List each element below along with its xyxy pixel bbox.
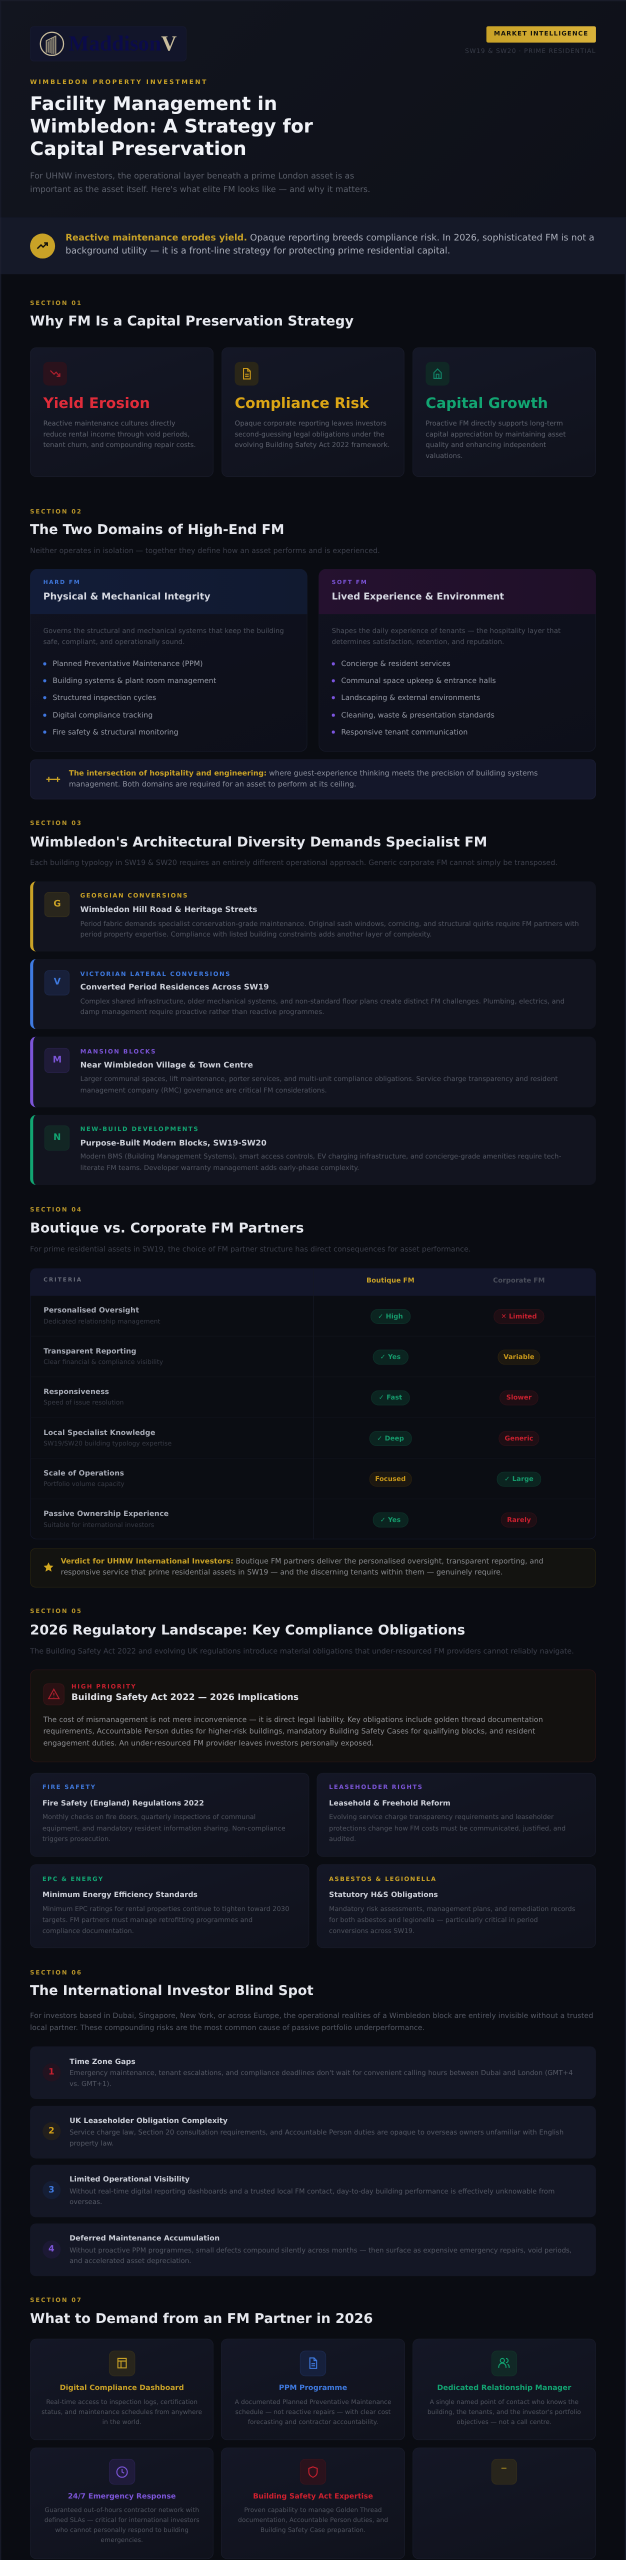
panel text: requirements, Accountable Person duties for higher-risk buildings, mandatory Building Safety Cases for qualifying blocks, and resident <box>43 1727 535 1735</box>
item text: and accelerated asset depreciation. <box>69 2257 191 2265</box>
card heading: Leasehold & Freehold Reform <box>329 1799 450 1807</box>
list: Concierge & resident services <box>341 659 450 668</box>
card text: valuations. <box>426 452 463 460</box>
number 4: 4 <box>48 2244 54 2254</box>
badge N <box>45 1126 70 1151</box>
card text: period property expertise. Compliance with listed building constraints adds another layer of complexity. <box>80 930 432 939</box>
icon: people <box>491 2351 517 2376</box>
criterion note: Dedicated relationship management <box>44 1319 160 1325</box>
panel text: The cost of mismanagement is not mere inconvenience — it is direct legal liability. Key obligations include golden thread documentation <box>43 1715 543 1724</box>
verdict text: Verdict for UHNW International Investors: Boutique FM partners deliver the personalised oversight, transparent reporting, and <box>61 1557 543 1565</box>
card: fire safety <box>30 1773 309 1857</box>
card text <box>42 1814 285 1843</box>
card text <box>426 419 566 460</box>
card: mansion blocks <box>30 1037 596 1107</box>
callout: verdict <box>30 1548 596 1587</box>
card text: compliance documentation. <box>42 1927 134 1935</box>
heading: Wimbledon's Architectural Diversity Demands Specialist FM <box>30 834 487 850</box>
pill: corporate: Generic <box>505 1435 533 1442</box>
section label: SECTION 02 <box>30 509 82 515</box>
pill: boutique <box>371 1390 410 1406</box>
pill: boutique: ✓ Yes <box>380 1353 401 1361</box>
card: new-build developments <box>30 1115 596 1185</box>
card text: documentation, Accountable Person duties, and <box>238 2517 388 2524</box>
card text: second-guessing legal obligations under the <box>235 430 384 438</box>
section 03 <box>30 820 596 1185</box>
tag: HARD FM <box>43 580 81 586</box>
icon: trending down <box>43 362 67 386</box>
icon: clock <box>109 2459 135 2485</box>
card text: forecasting and contractor accountability. <box>248 2419 378 2426</box>
pill: boutique <box>370 1309 410 1324</box>
card text: management company (RMC) governance are critical FM considerations. <box>80 1086 327 1094</box>
list: Fire safety & structural monitoring <box>53 728 178 736</box>
card text <box>427 2399 581 2426</box>
heading: The Two Domains of High-End FM <box>30 522 284 538</box>
pill: corporate: ✓ Large <box>504 1475 533 1483</box>
summary strip <box>0 217 626 274</box>
heading: 2026 Regulatory Landscape: Key Compliance Obligations <box>30 1623 465 1638</box>
pill: boutique: ✓ High <box>378 1313 403 1320</box>
panel heading: Physical & Mechanical Integrity <box>43 591 210 602</box>
logo wordmark: MaddisonV <box>69 32 177 55</box>
card text <box>80 919 579 939</box>
tag: VICTORIAN LATERAL CONVERSIONS <box>80 971 231 978</box>
card text <box>221 2506 405 2536</box>
card heading: PPM Programme <box>279 2383 347 2392</box>
card: empty placeholder <box>412 2447 596 2559</box>
section 05 <box>30 1608 596 1948</box>
description: safe, compliant, and operationally sound. <box>43 638 185 646</box>
item text: Service charge law, Section 20 consultation requirements, and Accountable Person duties are opaque to overseas owners unfamiliar with English <box>69 2128 564 2136</box>
card text: capital appreciation by maintaining asset <box>426 430 566 438</box>
card text: audited. <box>329 1836 356 1843</box>
pill: corporate: Variable <box>504 1353 534 1361</box>
description <box>332 627 561 646</box>
card text: evolving Building Safety Act 2022 framework. <box>235 441 390 449</box>
pill: corporate <box>499 1431 539 1446</box>
criterion: Responsiveness <box>44 1387 109 1396</box>
callout text <box>68 768 538 788</box>
number 2 <box>42 2122 60 2140</box>
description: Governs the structural and mechanical systems that keep the building <box>43 627 284 635</box>
section intro: Each building typology in SW19 & SW20 requires an entirely different operational approach. Generic corporate FM cannot simply be transposed. <box>30 858 558 867</box>
card heading: Statutory H&S Obligations <box>329 1890 438 1899</box>
list: Landscaping & external environments <box>341 693 480 702</box>
callout text: The intersection of hospitality and engineering: where guest-experience thinking meets the precision of building systems <box>69 768 538 777</box>
column: boutique: Boutique FM <box>366 1276 414 1285</box>
title <box>30 93 313 161</box>
icon: trending up <box>30 233 55 258</box>
icon: dashboard <box>109 2351 135 2376</box>
icon: placeholder <box>491 2459 517 2485</box>
list: Building systems & plant room management <box>53 676 216 685</box>
verdict text: responsive service that prime residential assets in SW19 — and the discerning tenants within them — genuinely require. <box>61 1568 503 1577</box>
eyebrow: WIMBLEDON PROPERTY INVESTMENT <box>30 79 208 86</box>
section label: SECTION 01 <box>30 300 82 306</box>
list: Responsive tenant communication <box>341 728 468 736</box>
section label: SECTION 06 <box>30 1969 82 1976</box>
criterion: Personalised Oversight <box>44 1306 139 1315</box>
item heading: Limited Operational Visibility <box>69 2175 190 2184</box>
card text <box>234 2399 391 2426</box>
description <box>43 627 284 646</box>
card text <box>80 1075 558 1094</box>
pill: boutique <box>373 1350 408 1365</box>
card: EPC and energy <box>30 1864 309 1948</box>
subtitle <box>30 172 370 195</box>
pill: boutique <box>373 1512 408 1528</box>
pill: corporate <box>497 1472 541 1487</box>
section intro: For investors based in Dubai, Singapore, New York, or across Europe, the operational realities of a Wimbledon block are entirely invisible without a trusted <box>30 2011 593 2020</box>
logo: MaddisonV <box>30 26 187 61</box>
section label: SECTION 07 <box>30 2297 82 2304</box>
card text: reduce rental income through void periods, <box>43 430 190 438</box>
summary text <box>65 233 594 256</box>
section intro: Neither operates in isolation — together they define how an asset performs and is experienced. <box>30 546 380 555</box>
card: capital growth <box>413 347 596 477</box>
list: Digital compliance tracking <box>53 711 153 719</box>
badge G <box>45 892 70 917</box>
tag: LEASEHOLDER RIGHTS <box>329 1784 423 1791</box>
card text: schedule — not reactive repairs — with clear cost <box>235 2409 391 2416</box>
card text: Building Safety Case preparation. <box>260 2527 366 2534</box>
icon: star <box>44 1562 54 1572</box>
heading: The International Investor Blind Spot <box>30 1983 313 1999</box>
icon: document <box>235 362 259 386</box>
number 4 <box>42 2240 60 2258</box>
tag: HIGH PRIORITY <box>71 1683 137 1690</box>
header panel <box>0 0 626 217</box>
card text: building, the tenants, and the investor's portfolio <box>427 2409 581 2416</box>
panel: soft FM <box>319 569 596 752</box>
list <box>332 659 496 736</box>
item text: overseas. <box>69 2198 102 2206</box>
row: scale <box>30 1458 596 1499</box>
card heading: Capital Growth <box>426 395 548 412</box>
criterion: Transparent Reporting <box>44 1347 136 1355</box>
column: corporate: Corporate FM <box>493 1276 545 1285</box>
title: Wimbledon: A Strategy for <box>30 116 313 138</box>
card text: emergencies. <box>101 2537 143 2544</box>
card text: who cannot personally respond to building <box>55 2527 189 2534</box>
card heading: Dedicated Relationship Manager <box>437 2383 571 2392</box>
card text: triggers prosecution. <box>42 1836 111 1843</box>
comparison table <box>30 1268 596 1539</box>
card: yield erosion <box>30 347 213 477</box>
badge: market intelligence: MARKET INTELLIGENCE <box>494 30 588 37</box>
subtitle: For UHNW investors, the operational layer beneath a prime London asset is as <box>30 172 354 181</box>
card text: Mandatory risk assessments, management plans, and remediation records <box>329 1905 575 1913</box>
icon: building emblem <box>40 32 64 56</box>
item heading: Time Zone Gaps <box>69 2057 135 2066</box>
summary text: background utility — it is a front-line strategy for protecting prime residential capital. <box>65 246 450 256</box>
card text: Evolving service charge transparency requirements and leaseholder <box>329 1814 554 1821</box>
summary text: Reactive maintenance erodes yield. Opaque reporting breeds compliance risk. In 2026, sophisticated FM is not a <box>65 233 594 243</box>
card text: Guaranteed out-of-hours contractor network with <box>45 2507 199 2514</box>
item heading: UK Leaseholder Obligation Complexity <box>69 2116 228 2125</box>
row: transparent reporting <box>30 1336 596 1377</box>
card text <box>42 2399 202 2426</box>
card text: quality and enhancing independent <box>426 441 546 449</box>
card text: Minimum EPC ratings for rental properties continue to tighten toward 2030 <box>42 1905 289 1913</box>
card text <box>80 1153 561 1172</box>
criterion note: Speed of issue resolution <box>44 1400 124 1407</box>
number 3 <box>42 2181 60 2199</box>
section 02 <box>30 509 596 800</box>
item 2: leaseholder complexity <box>30 2106 596 2158</box>
heading: Why FM Is a Capital Preservation Strategy <box>30 313 354 329</box>
item text: property law. <box>69 2139 114 2147</box>
pill: corporate: Rarely <box>507 1516 531 1524</box>
section intro: For prime residential assets in SW19, the choice of FM partner structure has direct consequences for asset performance. <box>30 1245 471 1253</box>
card text: literate FM teams. Developer warranty management adds early-phase complexity. <box>80 1164 359 1172</box>
card heading: Compliance Risk <box>235 395 369 412</box>
card heading: Near Wimbledon Village & Town Centre <box>80 1060 253 1070</box>
criterion note: Portfolio volume capacity <box>44 1481 124 1488</box>
panel text: engagement duties. An under-resourced FM provider leaves investors personally exposed. <box>43 1738 374 1747</box>
card text: Complex shared infrastructure, older mechanical systems, and non-standard floor plans create distinct FM challenges. Plumbing, electrics, and <box>80 997 564 1005</box>
tag: ASBESTOS & LEGIONELLA <box>329 1876 437 1883</box>
tag: GEORGIAN CONVERSIONS <box>80 893 188 900</box>
pill: corporate <box>501 1512 537 1528</box>
list: Structured inspection cycles <box>53 693 156 702</box>
table header <box>30 1268 596 1296</box>
panel header background <box>319 569 596 614</box>
item text <box>69 2246 572 2265</box>
card heading: Yield Erosion <box>43 395 150 412</box>
pill: corporate <box>500 1390 538 1406</box>
number 1 <box>42 2063 60 2081</box>
card text: damp management require proactive rather than reactive programmes. <box>80 1008 324 1016</box>
card text: Period fabric demands specialist conservation-grade maintenance. Original sash windows, cornicing, and structural quirks require FM partners with <box>80 919 579 928</box>
card text: Reactive maintenance cultures directly <box>43 419 175 427</box>
card text: Modern BMS (Building Management Systems), smart access controls, EV charging infrastructure, and concierge-grade amenities require tech- <box>80 1153 561 1161</box>
badge N: N <box>53 1132 61 1143</box>
badge V <box>45 970 70 995</box>
pill: corporate: ✕ Limited <box>501 1313 537 1320</box>
card text: Real-time access to inspection logs, certification <box>46 2399 198 2406</box>
section 04 <box>30 1207 596 1588</box>
card text <box>44 2507 199 2544</box>
pill: boutique: ✓ Fast <box>379 1394 402 1402</box>
card text: targets. FM partners must manage retrofitting programmes and <box>42 1916 253 1924</box>
list <box>43 659 216 736</box>
card text: Larger communal spaces, lift maintenance, porter services, and multi-unit compliance obligations. Service charge transparency and resident <box>80 1075 558 1083</box>
item text <box>69 2187 555 2206</box>
item 3: operational visibility <box>30 2165 596 2217</box>
card: PPM programme <box>221 2339 405 2440</box>
card text: in the world. <box>102 2419 141 2426</box>
card text: A documented Planned Preventative Maintenance <box>235 2399 391 2406</box>
card: Georgian conversions <box>30 881 596 952</box>
card text: defined SLAs — critical for international investors <box>44 2517 199 2524</box>
tag: NEW-BUILD DEVELOPMENTS <box>80 1126 199 1133</box>
card heading: Fire Safety (England) Regulations 2022 <box>42 1799 204 1807</box>
panel heading: Building Safety Act 2022 — 2026 Implications <box>71 1693 299 1703</box>
criterion: Local Specialist Knowledge <box>44 1428 155 1437</box>
card text <box>329 1814 566 1843</box>
badge G: G <box>54 899 61 909</box>
criterion note: SW19/SW20 building typology expertise <box>44 1441 172 1447</box>
badge M <box>45 1048 70 1073</box>
card text: objectives — not a call centre. <box>457 2419 552 2426</box>
row: local knowledge <box>30 1418 596 1458</box>
item text: Without proactive PPM programmes, small defects compound silently across months — then surface as expensive emergency repairs, void periods, <box>69 2246 572 2254</box>
tag: SOFT FM <box>332 580 368 586</box>
panel header background <box>30 569 307 614</box>
card text: conversions across SW19. <box>329 1927 415 1935</box>
card: Victorian lateral conversions <box>30 959 596 1029</box>
card text <box>80 997 564 1016</box>
icon: document <box>300 2351 326 2376</box>
item text <box>69 2069 573 2088</box>
row: responsiveness <box>30 1377 596 1418</box>
pill: corporate <box>498 1350 540 1365</box>
section label: SECTION 05 <box>30 1608 82 1615</box>
list: Cleaning, waste & presentation standards <box>341 711 495 719</box>
section intro <box>30 2011 593 2032</box>
icon: shield <box>300 2459 326 2485</box>
card text: equipment, and mandatory resident information sharing. Non-compliance <box>42 1825 285 1832</box>
card text <box>329 1905 575 1935</box>
criterion note: Suitable for international investors <box>44 1522 154 1529</box>
pill: boutique <box>369 1472 412 1487</box>
tag: MANSION BLOCKS <box>80 1048 156 1055</box>
list: Communal space upkeep & entrance halls <box>341 676 496 685</box>
card heading: Purpose-Built Modern Blocks, SW19-SW20 <box>80 1138 267 1147</box>
card: asbestos and legionella <box>317 1864 596 1948</box>
location tag: SW19 & SW20 · PRIME RESIDENTIAL <box>465 48 596 55</box>
section label: SECTION 04 <box>30 1207 82 1213</box>
number 2: 2 <box>48 2126 54 2136</box>
section label: SECTION 03 <box>30 820 82 827</box>
panel heading: Lived Experience & Environment <box>332 591 504 602</box>
pill: corporate: Slower <box>506 1394 532 1402</box>
callout: intersection <box>30 759 596 799</box>
pill: boutique: ✓ Yes <box>380 1516 401 1524</box>
card: relationship manager <box>412 2339 596 2440</box>
card text: Opaque corporate reporting leaves investors <box>235 419 386 427</box>
card text: Proactive FM directly supports long-term <box>426 419 563 427</box>
item 1: time zone gaps <box>30 2047 596 2099</box>
item heading: Deferred Maintenance Accumulation <box>69 2234 220 2243</box>
item text: Emergency maintenance, tenant escalations, and compliance deadlines don't wait for convenient calling hours between Dubai and London (GMT+4 <box>69 2069 573 2077</box>
heading: Boutique vs. Corporate FM Partners <box>30 1221 304 1236</box>
card heading: Converted Period Residences Across SW19 <box>80 982 269 992</box>
list: Planned Preventative Maintenance (PPM) <box>53 659 203 668</box>
card text: Monthly checks on fire doors, quarterly inspections of communal <box>42 1814 256 1821</box>
card: leaseholder rights <box>317 1773 596 1857</box>
icon: warning <box>43 1683 64 1705</box>
badge: market intelligence <box>486 26 596 43</box>
criterion note: Clear financial & compliance visibility <box>44 1359 163 1366</box>
item text: Without real-time digital reporting dashboards and a trusted local FM contact, day-to-day building performance is effectively unknowable from <box>69 2187 555 2195</box>
card text: A single named point of contact who knows the <box>430 2399 579 2406</box>
pill: boutique: ✓ Deep <box>377 1435 404 1442</box>
icon: home <box>426 362 449 386</box>
pill: boutique <box>369 1431 412 1446</box>
title: Capital Preservation <box>30 139 247 161</box>
card text <box>42 1905 289 1935</box>
pill: corporate <box>494 1309 544 1324</box>
criterion: Scale of Operations <box>44 1469 124 1477</box>
section intro: local partner. These compounding risks are the most common cause of passive portfolio underperformance. <box>30 2023 425 2032</box>
heading: What to Demand from an FM Partner in 2026 <box>30 2311 373 2327</box>
panel: hard FM <box>30 569 307 752</box>
row: personalised oversight <box>30 1296 596 1336</box>
verdict text <box>60 1557 543 1577</box>
tag: FIRE SAFETY <box>42 1784 96 1791</box>
callout text: management. Both domains are required for an asset to perform at its ceiling. <box>69 779 356 788</box>
number 3: 3 <box>48 2185 54 2195</box>
subtitle: important as the asset itself. Here's what elite FM looks like — and why it matters. <box>30 185 370 195</box>
tag: EPC & ENERGY <box>42 1876 104 1883</box>
card: dashboard <box>30 2339 214 2440</box>
card heading: Wimbledon Hill Road & Heritage Streets <box>80 905 257 914</box>
section 01 <box>30 300 596 477</box>
row: passive ownership <box>44 1509 537 1529</box>
card text: for both asbestos and legionella — particularly critical in period <box>329 1916 538 1924</box>
badge M: M <box>53 1055 62 1065</box>
item text <box>69 2128 564 2147</box>
panel text <box>43 1715 543 1747</box>
criterion: Passive Ownership Experience <box>44 1509 169 1518</box>
card heading: Building Safety Act Expertise <box>253 2492 373 2500</box>
card text: tenant churn, and compounding repair costs. <box>43 441 196 449</box>
card: emergency response <box>30 2447 214 2559</box>
badge V: V <box>54 977 61 987</box>
section intro: The Building Safety Act 2022 and evolving UK regulations introduce material obligations that under-resourced FM providers cannot reliably navigate. <box>30 1647 574 1655</box>
description: determines satisfaction, retention, and reputation. <box>332 638 504 646</box>
item 4: deferred maintenance <box>30 2224 596 2276</box>
pill: boutique: Focused <box>375 1475 406 1483</box>
number 1: 1 <box>48 2067 54 2077</box>
description: Shapes the daily experience of tenants — the hospitality layer that <box>332 627 561 635</box>
title: Facility Management in <box>30 93 277 115</box>
item text: vs. GMT+1). <box>69 2080 111 2088</box>
card heading: Digital Compliance Dashboard <box>60 2383 184 2392</box>
icon: double arrow <box>46 776 60 782</box>
card text: Proven capability to manage Golden Thread <box>244 2507 382 2514</box>
card: compliance risk <box>222 347 404 477</box>
card text: status, and maintenance schedules from anywhere <box>42 2409 202 2416</box>
card heading: Minimum Energy Efficiency Standards <box>42 1890 198 1899</box>
card text <box>43 419 196 449</box>
card heading: 24/7 Emergency Response <box>68 2492 176 2500</box>
card: building safety act expertise <box>221 2447 405 2559</box>
panel: high priority <box>30 1669 596 1762</box>
card text <box>235 419 390 449</box>
column: criteria: CRITERIA <box>44 1277 82 1283</box>
card text: protections change how FM costs must be communicated, justified, and <box>329 1825 566 1832</box>
